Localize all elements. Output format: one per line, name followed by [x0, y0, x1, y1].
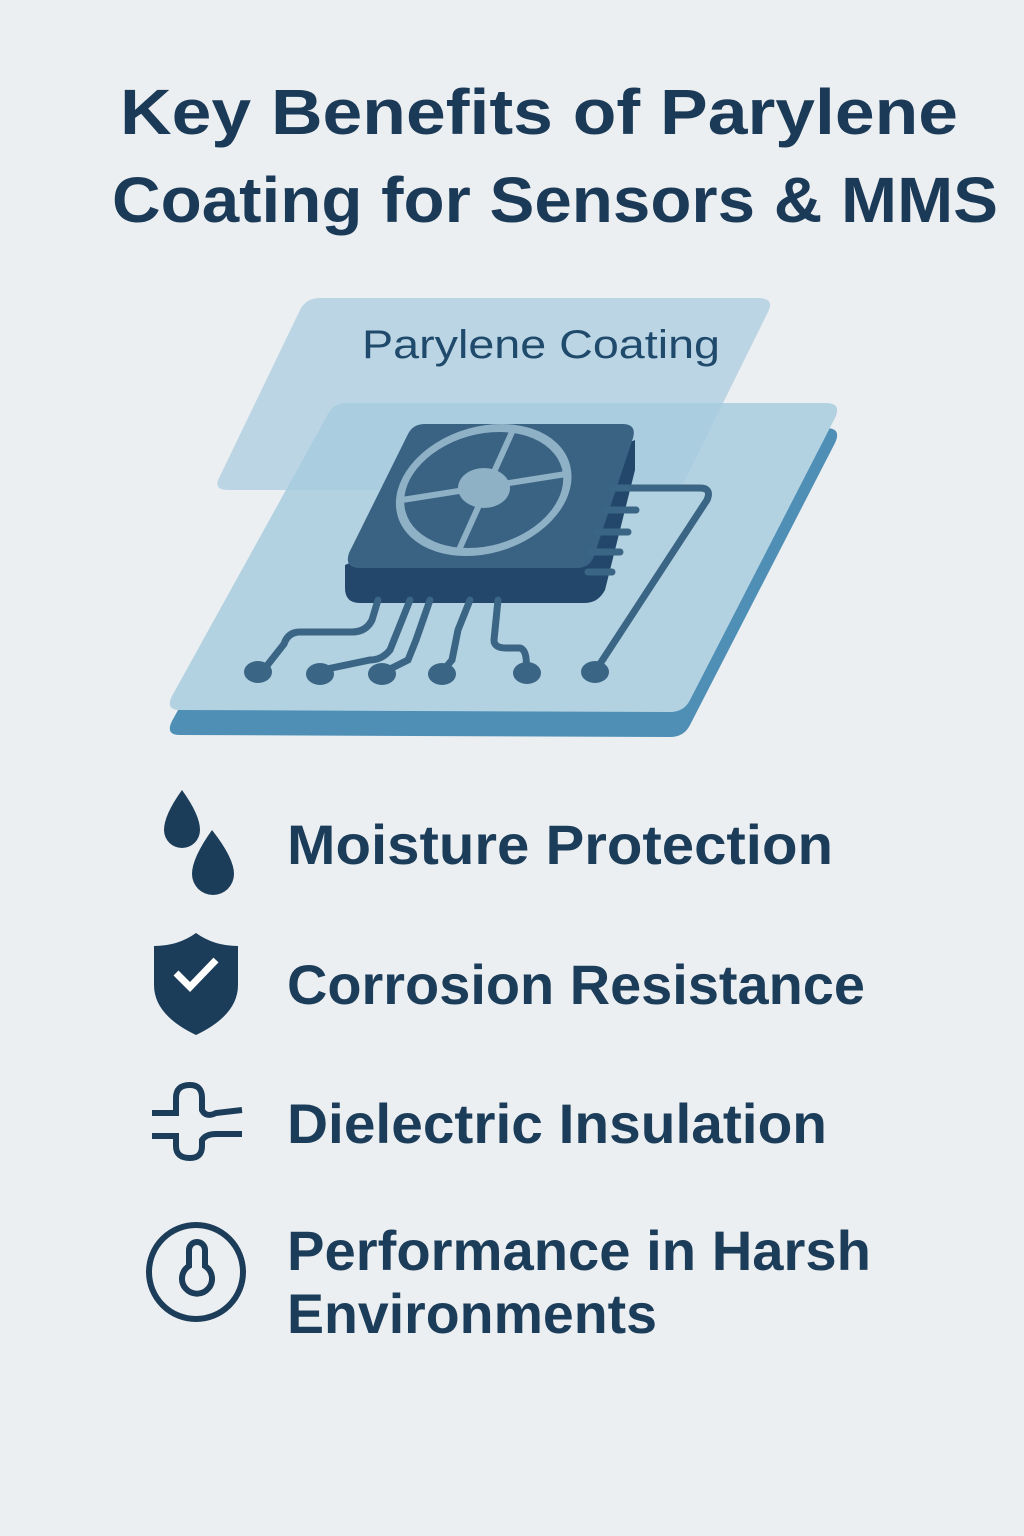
board top	[170, 403, 837, 712]
coating plane	[217, 298, 770, 490]
traces	[262, 488, 708, 672]
benefit: corrosion	[154, 933, 865, 1035]
title: Key Benefits of Parylene	[120, 76, 958, 148]
benefit: harsh environments: Environments	[287, 1282, 657, 1345]
icon: insulation	[152, 1085, 242, 1158]
benefit: dielectric	[152, 1085, 827, 1158]
pads	[244, 661, 609, 685]
benefit: corrosion: Corrosion Resistance	[287, 953, 865, 1016]
board edge	[170, 428, 837, 737]
benefit: moisture: Moisture Protection	[287, 813, 833, 876]
icon: shield check	[154, 933, 238, 1035]
icon: thermometer circle	[149, 1225, 243, 1319]
coating label: Parylene Coating	[362, 323, 720, 367]
icon: water drops	[164, 790, 234, 895]
benefit: moisture	[164, 790, 833, 895]
benefit: dielectric: Dielectric Insulation	[287, 1092, 827, 1155]
title: Coating for Sensors & MMS	[112, 164, 998, 236]
title	[112, 76, 998, 236]
benefit: harsh environments	[149, 1219, 871, 1345]
illustration: coated sensor chip	[170, 298, 837, 737]
chip	[345, 424, 635, 603]
benefit: harsh environments: Performance in Harsh	[287, 1219, 871, 1282]
